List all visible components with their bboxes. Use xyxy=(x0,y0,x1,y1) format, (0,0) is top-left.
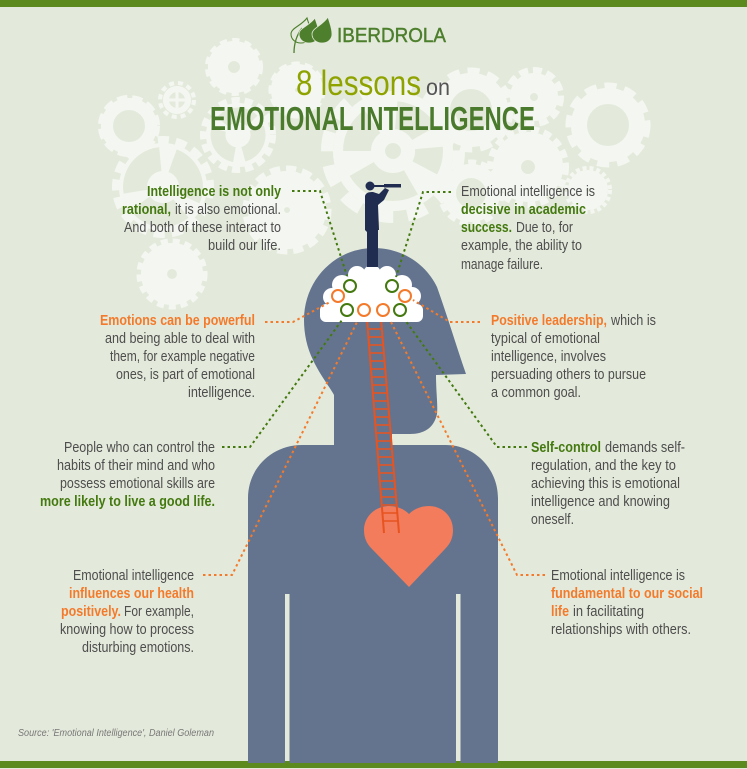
text: lesson 3: Emotions can be powerful xyxy=(100,313,255,329)
text: lesson 8: relationships with others. xyxy=(551,622,691,638)
text: lesson 8: fundamental to our social xyxy=(551,586,703,602)
bottom bar xyxy=(0,761,747,768)
text: lesson 8: life xyxy=(551,604,569,620)
text: lesson 5: more likely to live a good life. xyxy=(40,494,215,510)
bar under arm gaps xyxy=(285,761,460,763)
leader 5 xyxy=(222,320,342,447)
text: lesson 1: build our life. xyxy=(208,238,281,254)
text: lesson 6: achieving this is emotional xyxy=(531,476,680,492)
text: lesson 4: intelligence, involves xyxy=(491,349,606,365)
leader lines xyxy=(203,191,545,575)
text: lesson 5: possess emotional skills are xyxy=(60,476,215,492)
leader 4 xyxy=(413,300,480,322)
arm line left xyxy=(285,594,290,761)
text: lesson 2: Due to, for xyxy=(516,220,573,236)
text: lesson 1: Intelligence is not only xyxy=(147,184,281,200)
body xyxy=(248,248,498,763)
leader 7 xyxy=(203,320,358,575)
icon: leaves xyxy=(291,17,332,53)
text: lesson 4: a common goal. xyxy=(491,385,581,401)
leader 6 xyxy=(405,320,527,447)
text: lesson 4: typical of emotional xyxy=(491,331,600,347)
text: lesson 7: positively. xyxy=(61,604,121,620)
wordmark: IBERDROLA xyxy=(337,24,446,47)
logo: Iberdrola xyxy=(291,17,446,53)
text: lesson 2: decisive in academic xyxy=(461,202,586,218)
text: lesson 2: Emotional intelligence is xyxy=(461,184,595,200)
text: lesson 8 xyxy=(551,568,703,638)
top bar xyxy=(0,0,747,7)
heart xyxy=(364,506,453,587)
text: lesson 4 xyxy=(491,313,656,401)
text: lesson 6: oneself. xyxy=(531,512,574,528)
text: lesson 6: demands self- xyxy=(605,440,685,456)
text: lesson 2 xyxy=(461,184,595,273)
text: lesson 3: them, for example negative xyxy=(110,349,255,365)
text: lesson 1: rational, xyxy=(122,202,171,218)
text: lesson 4: persuading others to pursue xyxy=(491,367,646,383)
text: lesson 1: it is also emotional. xyxy=(175,202,281,218)
figure: man with telescope xyxy=(365,182,401,267)
text: lesson 2: manage failure. xyxy=(461,257,543,273)
text: lesson 5: People who can control the xyxy=(64,440,215,456)
text: lesson 6: Self-control xyxy=(531,440,601,456)
leader 3 xyxy=(265,302,330,322)
text: lesson 8: Emotional intelligence is xyxy=(551,568,685,584)
text: lesson 4: Positive leadership, xyxy=(491,313,607,329)
arm line right xyxy=(456,594,460,761)
text: lesson 1: And both of these interact to xyxy=(124,220,281,236)
background gears xyxy=(101,40,647,307)
title: EMOTIONAL INTELLIGENCE xyxy=(210,100,535,137)
text: lesson 7: Emotional intelligence xyxy=(73,568,194,584)
text: lesson 1 xyxy=(122,184,281,254)
ladder xyxy=(367,319,399,533)
text: lesson 4: which is xyxy=(610,313,656,329)
text: lesson 7: For example, xyxy=(124,604,194,620)
leader 1 xyxy=(292,191,347,276)
text: lesson 3 xyxy=(100,313,255,401)
text: lesson 7: knowing how to process xyxy=(60,622,194,638)
title xyxy=(210,64,535,137)
text: lesson 3: and being able to deal with xyxy=(105,331,255,347)
source note: Source: 'Emotional Intelligence', Daniel Goleman xyxy=(18,728,214,739)
text: lesson 6: regulation, and the key to xyxy=(531,458,676,474)
text: lesson 3: ones, is part of emotional xyxy=(116,367,255,383)
text: lesson 5 xyxy=(40,440,215,510)
text: lesson 6: intelligence and knowing xyxy=(531,494,670,510)
cloud xyxy=(320,265,423,322)
text: lesson 7: disturbing emotions. xyxy=(82,640,194,656)
text: lesson 7: influences our health xyxy=(69,586,194,602)
leader 8 xyxy=(390,320,545,575)
brain nodes xyxy=(332,280,411,316)
leader 2 xyxy=(396,192,451,277)
title: 8 lessons xyxy=(296,64,421,103)
silhouette xyxy=(248,248,498,763)
text: lesson 3: intelligence. xyxy=(188,385,255,401)
text: lesson 5: habits of their mind and who xyxy=(57,458,215,474)
title: on xyxy=(426,74,450,100)
text: lesson 2: example, the ability to xyxy=(461,238,582,254)
text: lesson 6 xyxy=(531,440,685,528)
text: lesson 7 xyxy=(60,568,194,656)
text: lesson 8: in facilitating xyxy=(573,604,644,620)
text: lesson 2: success. xyxy=(461,220,512,236)
